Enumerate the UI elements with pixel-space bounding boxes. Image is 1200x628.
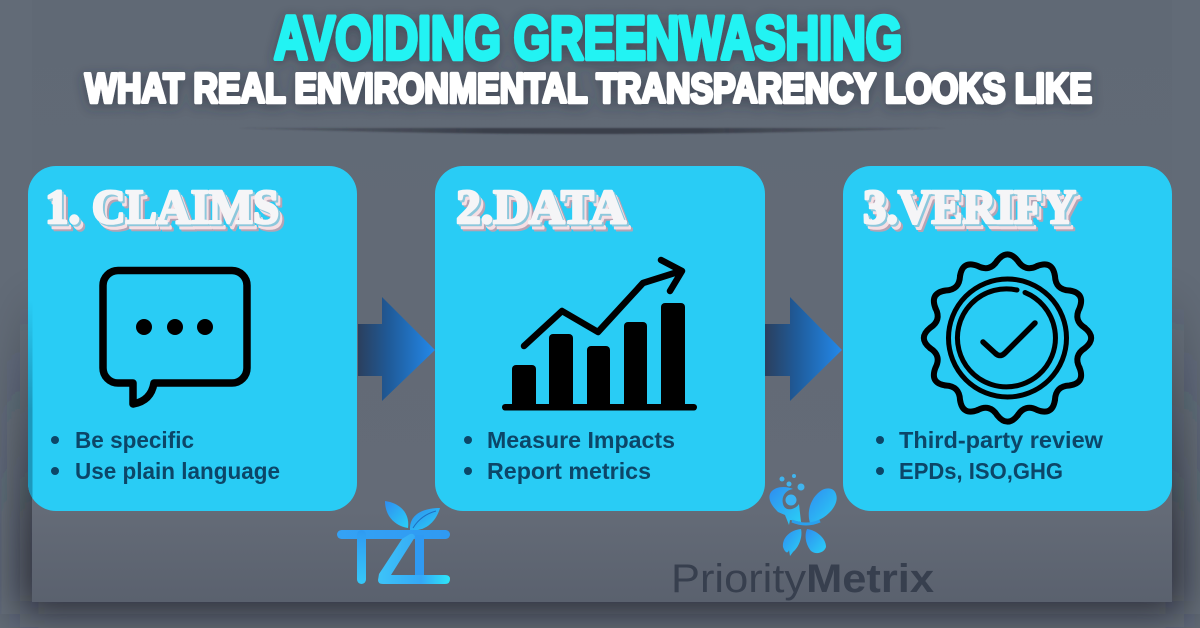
bullet list: Use plain language [75, 458, 280, 484]
bullet list: Report metrics [487, 458, 651, 484]
icon: speech bubble [103, 270, 247, 404]
logo: PriorityMetrix [671, 474, 934, 601]
heading: 3. verify: 3.VERIFY [863, 179, 1076, 234]
arrow: data to verify [765, 297, 842, 401]
heading: 2. data: 2.DATA [456, 179, 627, 234]
bullet list: Measure Impacts [487, 427, 675, 453]
icon: bar chart with arrow [502, 260, 697, 410]
logo: TZC [337, 501, 450, 584]
panel: claims [28, 166, 357, 511]
bullet list [51, 427, 280, 484]
wordmark: Priority Metrix [671, 557, 934, 601]
panel: data [435, 166, 765, 511]
bullet list: Be specific [75, 427, 194, 453]
bullet list [464, 427, 675, 484]
bullet list [876, 427, 1104, 484]
heading: 1. claims: 1. CLAIMS [45, 179, 279, 234]
heading: avoiding greenwashing: AVOIDING GREENWASHING [274, 4, 902, 72]
arrow: claims to data [358, 297, 435, 401]
panel: verify [843, 166, 1172, 511]
bullet list: Third-party review [899, 427, 1104, 453]
icon: verified badge [920, 251, 1095, 425]
title [85, 4, 1092, 112]
bullet list: EPDs, ISO,GHG [899, 458, 1063, 484]
icon: butterfly [769, 474, 837, 556]
